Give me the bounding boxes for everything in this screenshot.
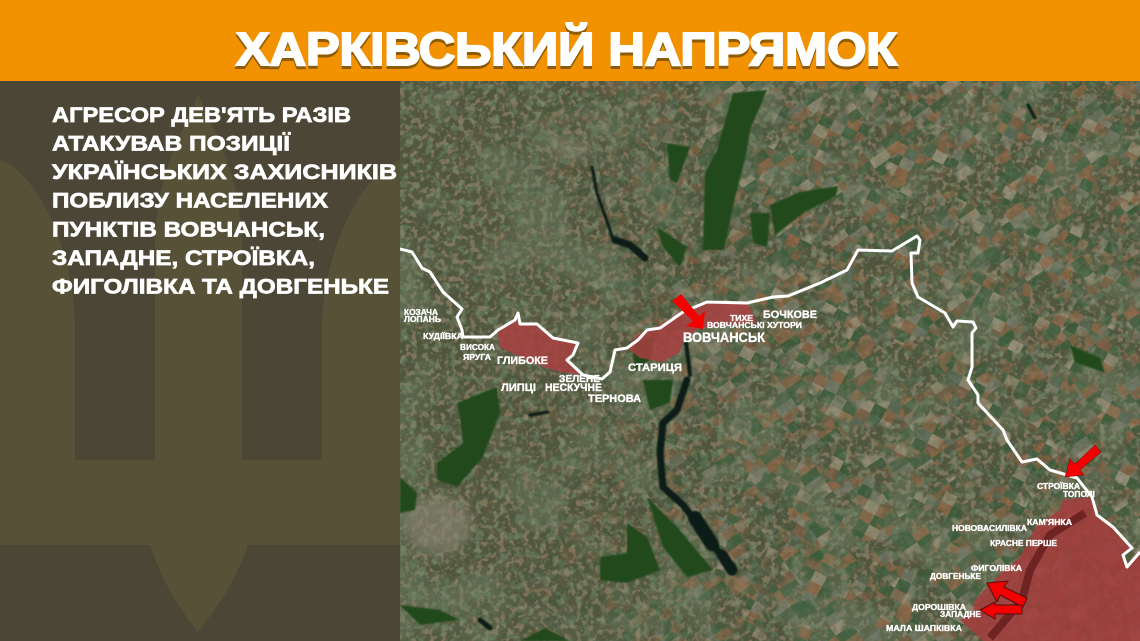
- place labels: СТРОЇВКА: [1037, 481, 1080, 491]
- place labels: ВИСОКА: [460, 342, 495, 352]
- place labels: ВОВЧАНСЬК: [683, 330, 766, 345]
- summary text: ФИГОЛІВКА ТА ДОВГЕНЬКЕ: [52, 274, 389, 298]
- summary text: ЗАПАДНЕ, СТРОЇВКА,: [52, 246, 315, 270]
- place labels: ТОПОЛІ: [1063, 489, 1095, 499]
- summary text: УКРАЇНСЬКИХ ЗАХИСНИКІВ: [52, 160, 397, 184]
- place labels: БОЧКОВЕ: [763, 309, 817, 321]
- occupied area: Hlyboke: [497, 318, 580, 375]
- city areas: [404, 140, 732, 555]
- place labels: ДОРОШІВКА: [912, 602, 966, 612]
- summary text: [52, 103, 397, 298]
- place labels: ЯРУГА: [463, 352, 491, 362]
- summary text: АТАКУВАВ ПОЗИЦІЇ: [52, 132, 291, 156]
- place labels: ФИГОЛІВКА: [971, 563, 1022, 573]
- title: ХАРКІВСЬКИЙ НАПРЯМОК: [236, 23, 898, 75]
- header band: [0, 0, 1140, 81]
- place labels: ТИХЕ: [730, 314, 754, 323]
- place labels: НЕСКУЧНЕ: [545, 382, 602, 394]
- place labels: КУДІЇВКА: [423, 331, 463, 341]
- place labels: НОВОВАСИЛІВКА: [952, 523, 1027, 533]
- summary text: ПОБЛИЗУ НАСЕЛЕНИХ: [52, 189, 329, 213]
- place labels: ТЕРНОВА: [588, 393, 641, 405]
- place labels: ВОВЧАНСЬКІ ХУТОРИ: [707, 320, 802, 330]
- arrow: Vovchansk attack: [672, 294, 705, 329]
- place labels: ЗАПАДНЕ: [940, 609, 981, 619]
- farm fields: [484, 81, 1140, 641]
- place labels: МАЛА ШАПКІВКА: [886, 623, 962, 633]
- place labels: СТАРИЦЯ: [628, 362, 682, 374]
- occupied area: south-east: [960, 497, 1140, 641]
- left panel with trident watermark: [0, 81, 400, 641]
- label: Kozacha Lopan: КОЗАЧА: [404, 307, 438, 317]
- summary text: ПУНКТІВ ВОВЧАНСЬК,: [52, 217, 325, 241]
- place labels: ЛОПАНЬ: [404, 314, 441, 324]
- frontline border: [400, 236, 1140, 567]
- occupied area: Vovchansk: [627, 302, 757, 362]
- arrow: Zakhidne attack: [980, 602, 1022, 619]
- place labels: КАМ'ЯНКА: [1027, 517, 1072, 527]
- arrow: Stroivka attack: [1065, 445, 1101, 477]
- rivers and reservoirs: [480, 105, 1035, 628]
- place labels: ГЛИБОКЕ: [497, 355, 548, 367]
- place labels: ЗЕЛЕНЕ: [559, 373, 600, 385]
- place labels: КРАСНЕ ПЕРШЕ: [990, 538, 1057, 548]
- arrow: Dovhenke attack: [987, 581, 1027, 607]
- forests: [400, 90, 1105, 641]
- place labels: ЛИПЦІ: [501, 382, 536, 394]
- place labels: [404, 307, 1095, 633]
- place labels: ДОВГЕНЬКЕ: [930, 571, 981, 581]
- satellite map: [400, 81, 1140, 641]
- summary text: АГРЕСОР ДЕВ'ЯТЬ РАЗІВ: [52, 103, 351, 127]
